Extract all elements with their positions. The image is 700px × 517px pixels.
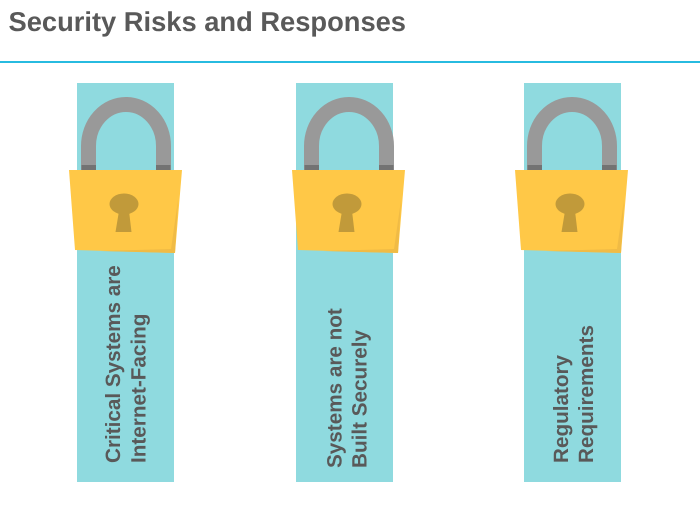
panel background 1 [77, 83, 174, 482]
panel background 2 [296, 83, 393, 482]
panel: regulatory requirements [515, 83, 628, 482]
header rule [0, 61, 700, 63]
panel: systems not secure [292, 83, 405, 482]
label: critical systems: Critical Systems are [102, 265, 125, 463]
icon: padlock 2 [292, 104, 405, 253]
icon: padlock 1 [69, 104, 182, 253]
label: regulatory requirements: Requirements [575, 325, 598, 463]
icon: padlock 3 [515, 104, 628, 253]
label: critical systems: Internet-Facing [128, 314, 150, 463]
label: regulatory requirements: Regulatory [550, 354, 573, 463]
title: Security Risks and Responses [8, 6, 406, 37]
label: systems not secure: Systems are not [324, 308, 346, 468]
label: systems not secure: Built Securely [348, 330, 372, 468]
panel background 3 [524, 83, 621, 482]
panel: critical systems [69, 83, 182, 482]
